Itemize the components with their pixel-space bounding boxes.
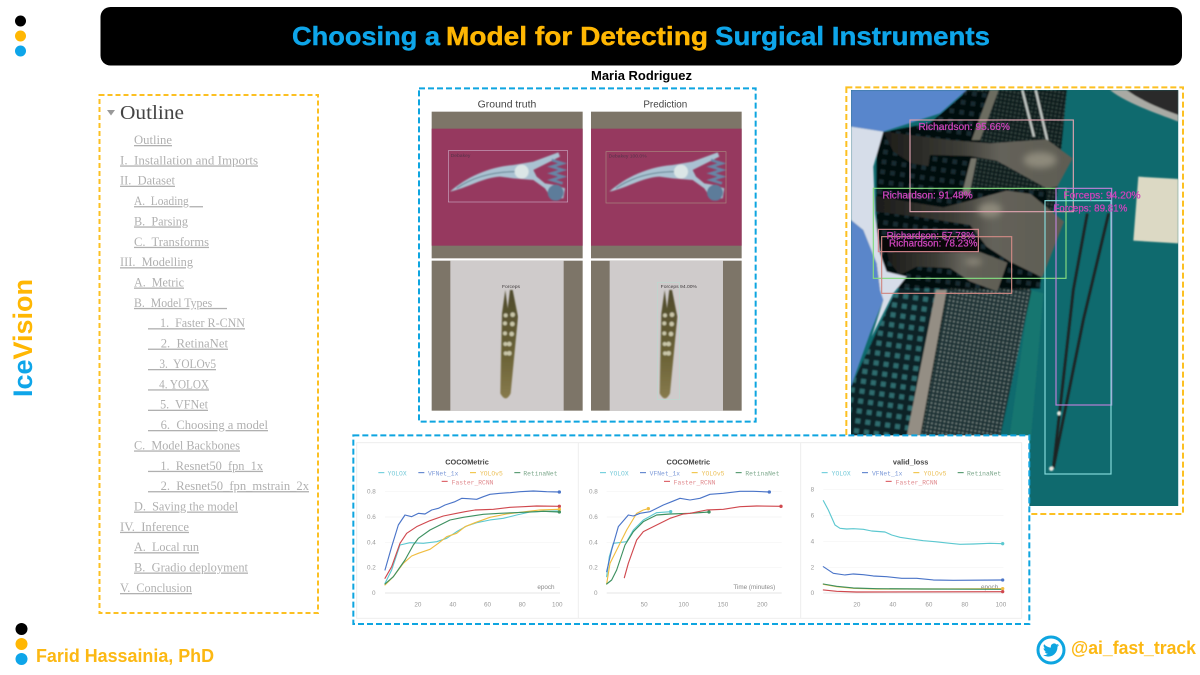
chart: validation loss: valid_loss: [893, 458, 928, 467]
chart: COCOMetric by time: Time (minutes): [733, 584, 775, 591]
vertical brand label: IceVision: IceVision: [8, 279, 38, 397]
legend: [600, 471, 780, 486]
panel: ground truth vs prediction: [419, 88, 756, 422]
outline entries: B. Parsing: [134, 213, 188, 228]
twitter handle: @ai_fast_track: [1071, 638, 1197, 658]
panel: training charts: [353, 435, 1029, 624]
legend: YOLOX: [610, 471, 629, 478]
image: ground truth forceps: [432, 261, 583, 411]
outline entries: C. Transforms: [134, 234, 209, 249]
chart: COCOMetric by epoch: 0: [372, 590, 376, 597]
drapes: [851, 90, 967, 132]
image: ground truth forceps: Forceps: [502, 284, 521, 290]
outline heading: Outline: [120, 102, 184, 124]
retractor blades: [876, 132, 1073, 291]
chart: COCOMetric by time: COCOMetric: [667, 458, 710, 467]
chart: COCOMetric by epoch: 80: [519, 602, 526, 609]
chart: COCOMetric by time: 50: [641, 602, 648, 609]
detection labels: Richardson: 95.66%: [918, 122, 1010, 133]
panel: outline table of contents: [100, 95, 318, 613]
outline entries: C. Model Backbones: [134, 437, 240, 452]
outline entries: A. Metric: [134, 274, 184, 290]
title banner: Surgical Instruments: [715, 21, 990, 51]
chart: COCOMetric by epoch: 0.8: [367, 489, 376, 496]
outline entries: D. Saving the model: [134, 498, 238, 514]
chart: COCOMetric by time: 150: [718, 602, 729, 609]
outline entries: Outline: [134, 132, 172, 147]
image: predicted clamp: [591, 112, 742, 258]
outline entries: A. Local run: [134, 539, 199, 554]
detection labels: Richardson: 57.78%: [887, 231, 975, 242]
legend: VFNet_1x: [428, 471, 459, 478]
outline entries: II. Dataset: [120, 173, 175, 188]
chart: COCOMetric by time: 0.2: [589, 565, 598, 572]
chart: validation loss: 4: [811, 538, 815, 545]
chart: COCOMetric by epoch: 0.2: [367, 565, 376, 572]
panel: surgical photo with detections: [846, 87, 1183, 514]
outline entries: 2. Resnet50_fpn_mstrain_2x: [148, 478, 309, 493]
chart: validation loss: 2: [811, 564, 815, 571]
wires: [1022, 90, 1047, 141]
legend: YOLOv5: [702, 471, 725, 478]
image: ground truth clamp: [432, 112, 583, 258]
detection labels: [882, 122, 1141, 250]
detection labels: Forceps: 89.81%: [1053, 204, 1128, 215]
outline entries: IV. Inference: [120, 519, 189, 534]
chart: COCOMetric by time: 0.6: [589, 514, 598, 521]
outline entries: 3. YOLOv5: [148, 356, 216, 371]
chart: validation loss: 100: [996, 602, 1007, 609]
chart: COCOMetric by epoch: 0.6: [367, 514, 376, 521]
legend: VFNet_1x: [650, 471, 680, 478]
chart: COCOMetric by epoch: COCOMetric: [445, 458, 489, 467]
legend: YOLOv5: [924, 471, 947, 478]
image: predicted forceps: [591, 261, 742, 411]
tray and perforations: [917, 90, 1067, 437]
column heading: prediction: Prediction: [643, 99, 687, 110]
chart: COCOMetric by epoch: 40: [449, 602, 457, 609]
legend: RetinaNet: [967, 471, 1001, 478]
blade highlights: [965, 152, 1057, 265]
chart: validation loss: 0: [811, 590, 815, 597]
forceps on drape: [1053, 213, 1109, 468]
legend: Faster_RCNN: [452, 479, 494, 486]
legend: RetinaNet: [745, 471, 780, 478]
image: predicted clamp: Debakey 100.0%: [609, 153, 647, 159]
decorative dots: bottom left: [16, 623, 28, 665]
outline entries: B. Gradio deployment: [134, 560, 248, 574]
legend: [378, 471, 558, 486]
outline entries: V. Conclusion: [120, 580, 192, 595]
legend: YOLOX: [832, 471, 851, 478]
chart: COCOMetric by epoch: 100: [552, 602, 563, 609]
outline entries: 6. Choosing a model: [148, 417, 268, 432]
chart: validation loss: [811, 458, 1007, 609]
legend: [822, 471, 1001, 486]
outline entries: III. Modelling: [120, 254, 193, 269]
detection labels: Forceps: 94.20%: [1063, 190, 1141, 201]
chart: validation loss: 8: [811, 487, 815, 494]
outline entries: 4. YOLOX: [148, 376, 210, 391]
chart: COCOMetric by epoch: epoch: [537, 584, 555, 591]
chart: COCOMetric by time: 0.8: [589, 489, 598, 496]
chart: COCOMetric by time: 200: [757, 602, 768, 609]
legend: YOLOv5: [480, 471, 503, 478]
chart: COCOMetric by time: 0.4: [589, 539, 598, 546]
detection labels: Richardson: 78.23%: [889, 239, 978, 250]
outline entries: [120, 132, 309, 595]
image: ground truth clamp: Debakey: [451, 153, 471, 159]
chart: COCOMetric by time: [589, 458, 783, 609]
gauze: [1133, 177, 1178, 243]
outline entries: B. Model Types: [134, 295, 227, 310]
chart: COCOMetric by epoch: 0.4: [367, 539, 376, 546]
chart: COCOMetric by epoch: 20: [414, 602, 422, 609]
chart: COCOMetric by epoch: [367, 458, 563, 609]
outline entries: A. Loading: [134, 193, 203, 208]
icon: twitter: [1038, 637, 1064, 663]
chart: validation loss: epoch: [981, 584, 999, 591]
chart: validation loss: 40: [889, 602, 897, 609]
outline entries: I. Installation and Imports: [120, 152, 258, 167]
detection labels: Richardson: 91.48%: [882, 190, 973, 201]
chart: validation loss: 20: [853, 602, 861, 609]
curved instrument top right: [1110, 90, 1178, 122]
column heading: ground truth: Ground truth: [478, 99, 536, 110]
decorative dots: top left: [15, 16, 26, 56]
author credit: Farid Hassainia, PhD: [36, 646, 214, 666]
title banner: Choosing a: [292, 21, 441, 51]
title banner: Model for Detecting: [446, 21, 708, 51]
legend: RetinaNet: [523, 471, 558, 478]
chart: validation loss: 6: [811, 513, 815, 520]
detection boxes: [882, 240, 978, 252]
outline entries: 2. RetinaNet: [148, 336, 228, 351]
legend: Faster_RCNN: [896, 479, 938, 486]
drape fold: [1000, 290, 1043, 506]
outline entries: 5. VFNet: [148, 397, 208, 412]
chart: COCOMetric by time: 100: [678, 602, 689, 609]
outline entries: 1. Faster R-CNN: [148, 315, 246, 330]
chart: COCOMetric by time: 0: [594, 590, 598, 597]
legend: Faster_RCNN: [674, 479, 716, 486]
chart: validation loss: 60: [925, 602, 933, 609]
chart: COCOMetric by epoch: 60: [484, 602, 492, 609]
chart: validation loss: 80: [961, 602, 969, 609]
author name: Maria Rodriguez: Maria Rodriguez: [591, 68, 692, 83]
image: predicted forceps: Forceps 94.00%: [661, 284, 698, 290]
legend: VFNet_1x: [872, 471, 903, 478]
title banner: [100, 7, 1182, 66]
outline entries: 1. Resnet50_fpn_1x: [148, 458, 263, 473]
legend: YOLOX: [388, 471, 407, 478]
